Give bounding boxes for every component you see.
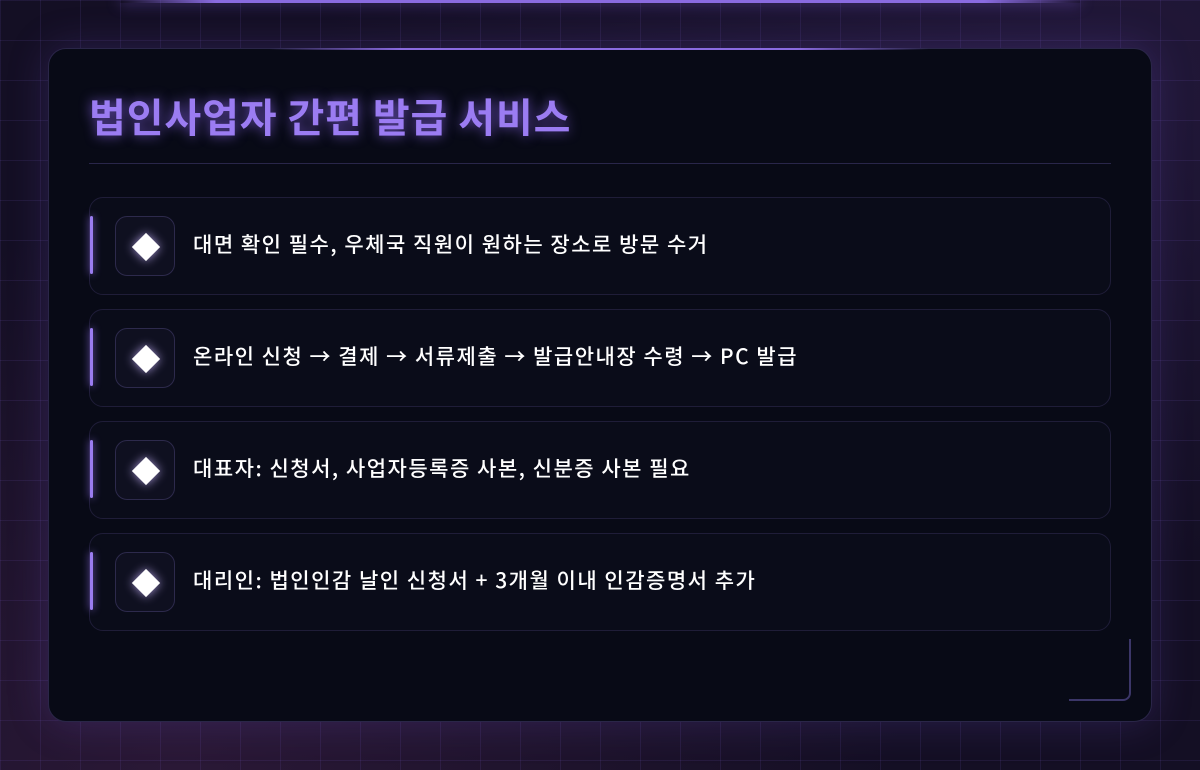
icon: diamond — [115, 440, 175, 500]
icon: diamond — [115, 552, 175, 612]
text 3: 대표자: 신청서, 사업자등록증 사본, 신분증 사본 필요 — [193, 453, 691, 483]
icon: diamond — [115, 216, 175, 276]
row 1 — [89, 197, 1111, 295]
title: 법인사업자 간편 발급 서비스 — [89, 86, 571, 144]
row 3 — [89, 421, 1111, 519]
text 1: 대면 확인 필수, 우체국 직원이 원하는 장소로 방문 수거 — [193, 229, 709, 259]
text 2: 온라인 신청 → 결제 → 서류제출 → 발급안내장 수령 → PC 발급 — [193, 341, 798, 371]
text 4: 대리인: 법인인감 날인 신청서 + 3개월 이내 인감증명서 추가 — [193, 565, 756, 595]
row 4 — [89, 533, 1111, 631]
icon: diamond — [115, 328, 175, 388]
row 2 — [89, 309, 1111, 407]
